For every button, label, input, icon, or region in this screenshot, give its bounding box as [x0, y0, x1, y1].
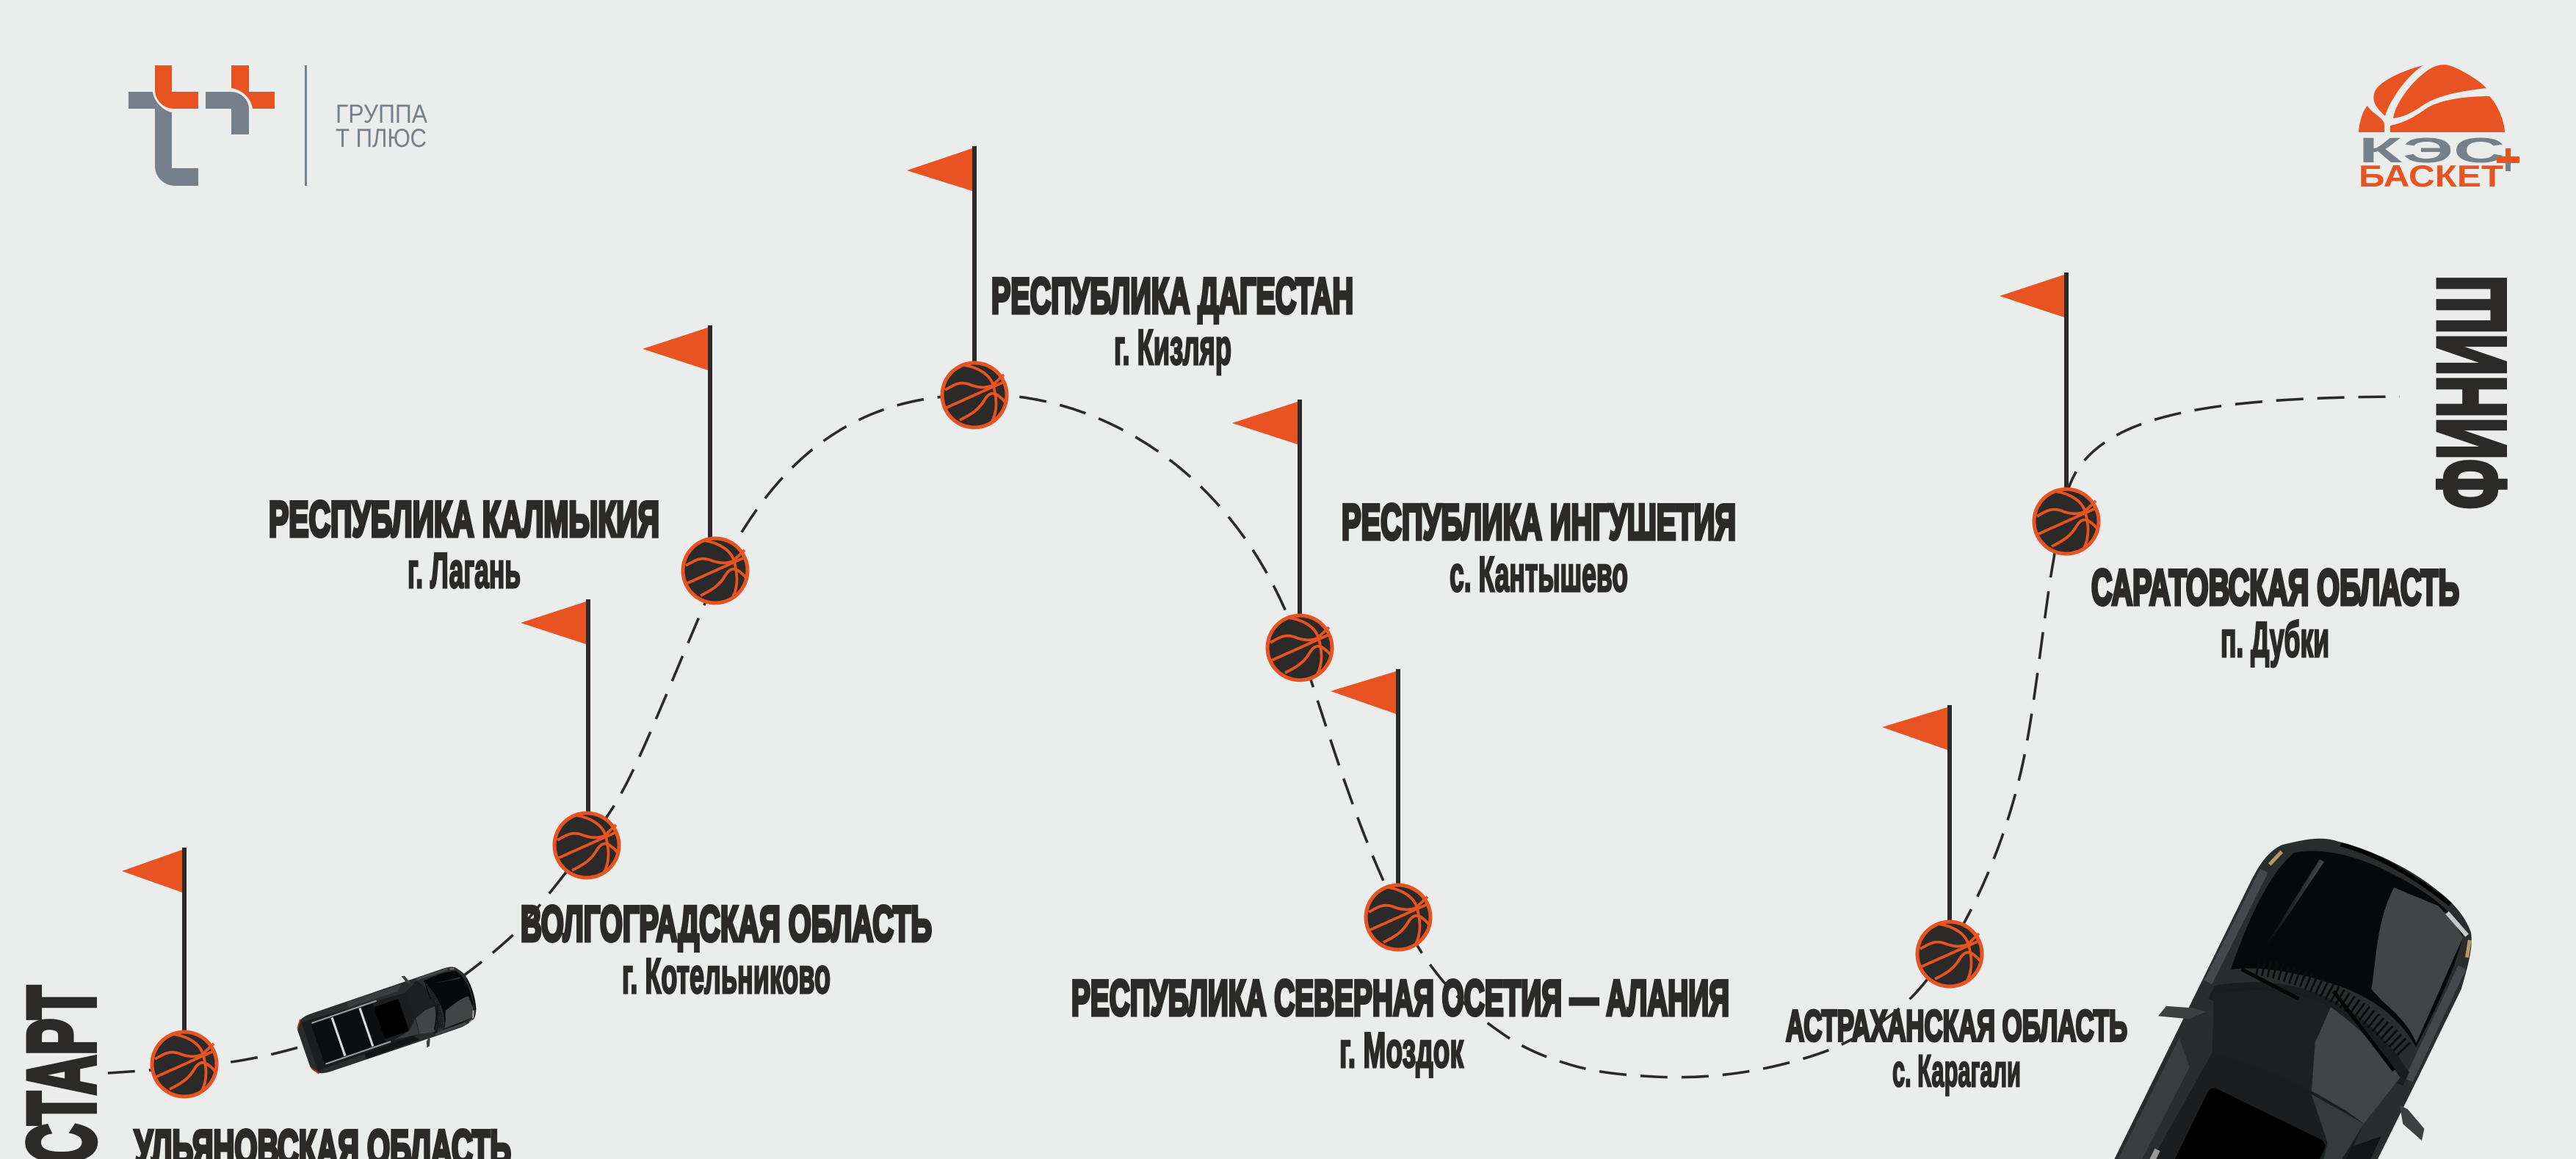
stop 6: flag and ball [1331, 669, 1430, 950]
stop 5: flag and ball [1232, 400, 1332, 680]
logo text [336, 100, 428, 153]
stop 8 label [2091, 560, 2459, 668]
logo: КЭС Баскет: БАСКЕТ [2359, 159, 2503, 193]
stop 2: flag and ball [521, 599, 619, 878]
start label: СТАРТ [7, 986, 115, 1159]
stop 5 label: с. Кантышево [1450, 546, 1628, 602]
stop 2 label: ВОЛГОГРАДСКАЯ ОБЛАСТЬ [521, 896, 932, 952]
stop 3 label [269, 491, 659, 599]
stop 8: flag and ball [2000, 272, 2099, 554]
stop 2 label [521, 896, 932, 1004]
stop 7 label: АСТРАХАНСКАЯ ОБЛАСТЬ [1786, 1002, 2127, 1050]
stop 6 label: РЕСПУБЛИКА СЕВЕРНАЯ ОСЕТИЯ — АЛАНИЯ [1071, 970, 1729, 1026]
stop 6 label [1071, 970, 1729, 1078]
stop 4 label: г. Кизляр [1114, 319, 1231, 375]
stop 6 label: г. Моздок [1339, 1022, 1464, 1078]
logo text: Т ПЛЮС [336, 124, 427, 153]
stop 7 label: с. Карагали [1892, 1046, 2021, 1096]
stop 8 label: п. Дубки [2221, 612, 2329, 668]
stop 3 label: РЕСПУБЛИКА КАЛМЫКИЯ [269, 491, 659, 547]
large car [1963, 799, 2526, 1159]
stop 4: flag and ball [907, 146, 1007, 427]
logo: Т Плюс group [129, 65, 428, 186]
stop 3 label: г. Лагань [408, 543, 521, 599]
finish label: ФИНИШ [2417, 275, 2525, 509]
logo text: ГРУППА [336, 100, 428, 129]
stop 7: flag and ball [1882, 705, 1982, 986]
logo: КЭС Баскет [2359, 65, 2519, 193]
stop 1: flag and ball [122, 848, 217, 1097]
stop 7 label [1786, 1002, 2127, 1096]
stop 5 label [1342, 494, 1736, 602]
dashed route [108, 395, 2400, 1077]
logo: КЭС Баскет: КЭС [2359, 131, 2505, 170]
small car [292, 956, 485, 1086]
stop 2 label: г. Котельниково [622, 948, 831, 1004]
stop 3: flag and ball [643, 325, 748, 603]
stop 5 label: РЕСПУБЛИКА ИНГУШЕТИЯ [1342, 494, 1736, 550]
stop 4 label [991, 268, 1353, 375]
stop 4 label: РЕСПУБЛИКА ДАГЕСТАН [991, 268, 1353, 324]
